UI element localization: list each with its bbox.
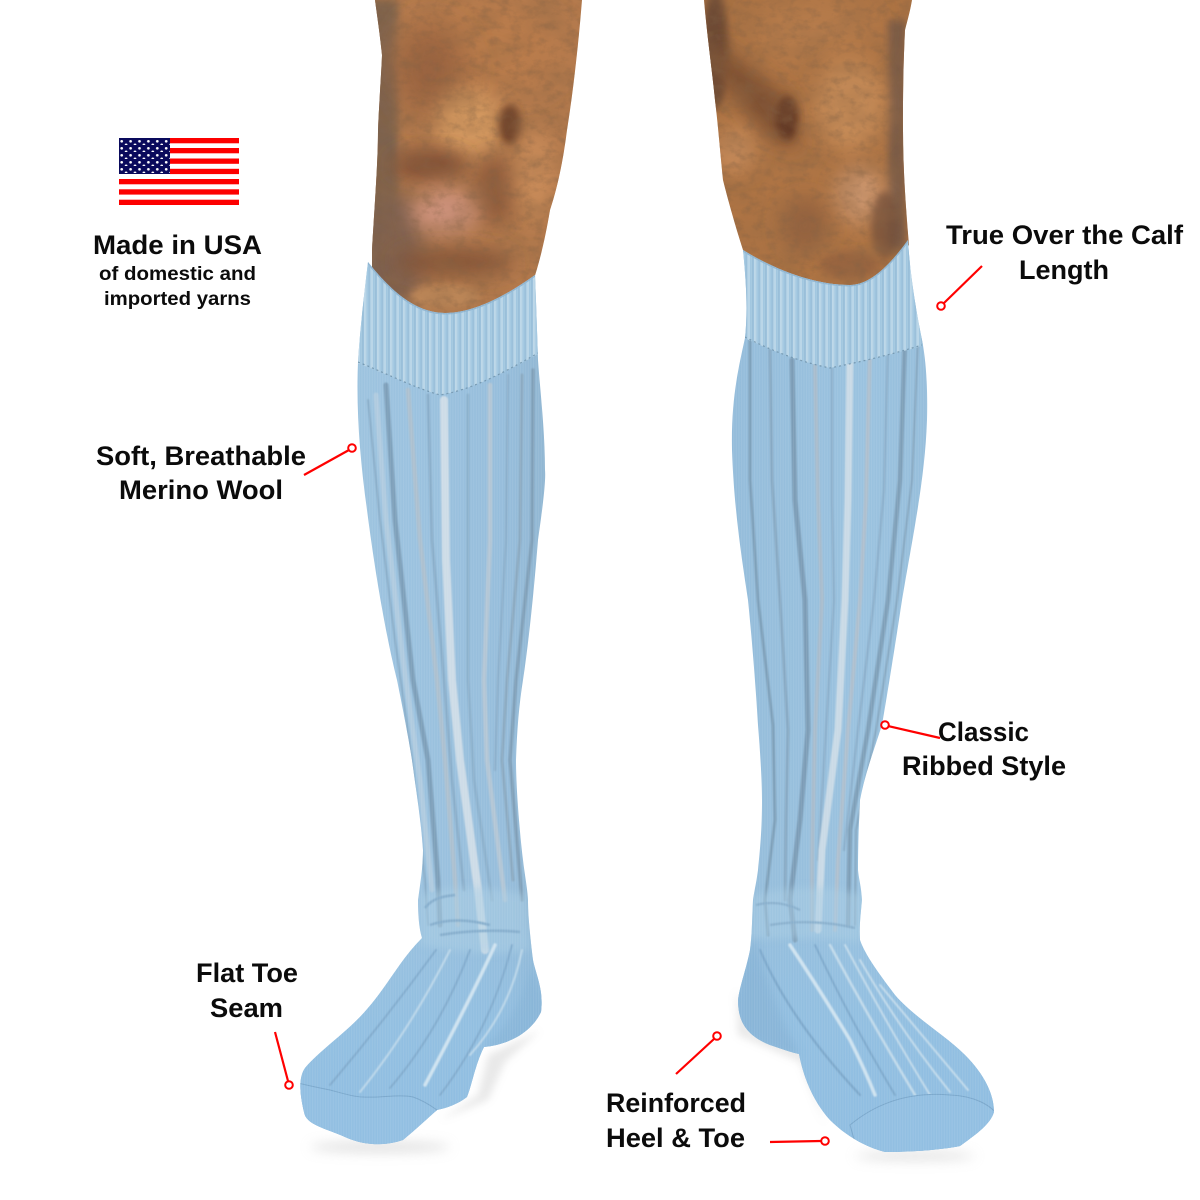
callout: Soft, Breathable Merino Wool: Merino Wool: [119, 475, 283, 505]
left sock ribs: [368, 370, 533, 950]
right heel shade: [738, 948, 790, 1051]
icon: American flag: [119, 138, 239, 205]
callout: Made in USA: of domestic and: [99, 263, 256, 285]
callout: True Over the Calf Length: [937, 220, 1184, 310]
right ankle folds: [754, 887, 858, 940]
left cuff: [354, 258, 540, 395]
callout: Reinforced Heel and Toe: Heel & Toe: [606, 1123, 745, 1153]
callout: Soft, Breathable Merino Wool: [96, 441, 356, 505]
callout: Made in USA: [93, 230, 262, 310]
right cuff: [738, 236, 926, 368]
callout: Made in USA: imported yarns: [104, 288, 251, 310]
left toe seam: [298, 1083, 437, 1150]
callout: Reinforced Heel and Toe: Reinforced: [606, 1088, 746, 1118]
callout: Soft, Breathable Merino Wool: Soft, Breathable: [96, 441, 306, 471]
callout: Flat Toe Seam: Seam: [210, 993, 283, 1023]
right sock ribs: [750, 340, 918, 940]
right leg skin: [704, 0, 912, 285]
foot shadows: [310, 990, 975, 1160]
left heel shade: [495, 987, 542, 1046]
callout: Classic Ribbed Style: Classic: [938, 717, 1029, 747]
callout: Classic Ribbed Style: [881, 717, 1066, 781]
left foot ribs: [330, 945, 522, 1095]
callout: Flat Toe Seam: Flat Toe: [196, 958, 298, 988]
right foot ribs: [760, 945, 968, 1095]
left sock: [300, 262, 546, 1144]
left leg skin: [372, 0, 582, 313]
callout: Reinforced Heel and Toe: [606, 1032, 829, 1153]
callout: Classic Ribbed Style: Ribbed Style: [902, 751, 1066, 781]
left ankle folds: [420, 888, 530, 953]
callout: Made in USA: Made in USA: [93, 230, 262, 260]
right sock: [725, 230, 1005, 1160]
callout: Flat Toe Seam: [196, 958, 298, 1089]
right toe seam: [850, 1094, 994, 1152]
callout: True Over the Calf Length: Length: [1019, 255, 1109, 285]
callout: True Over the Calf Length: True Over the Calf: [946, 220, 1184, 250]
